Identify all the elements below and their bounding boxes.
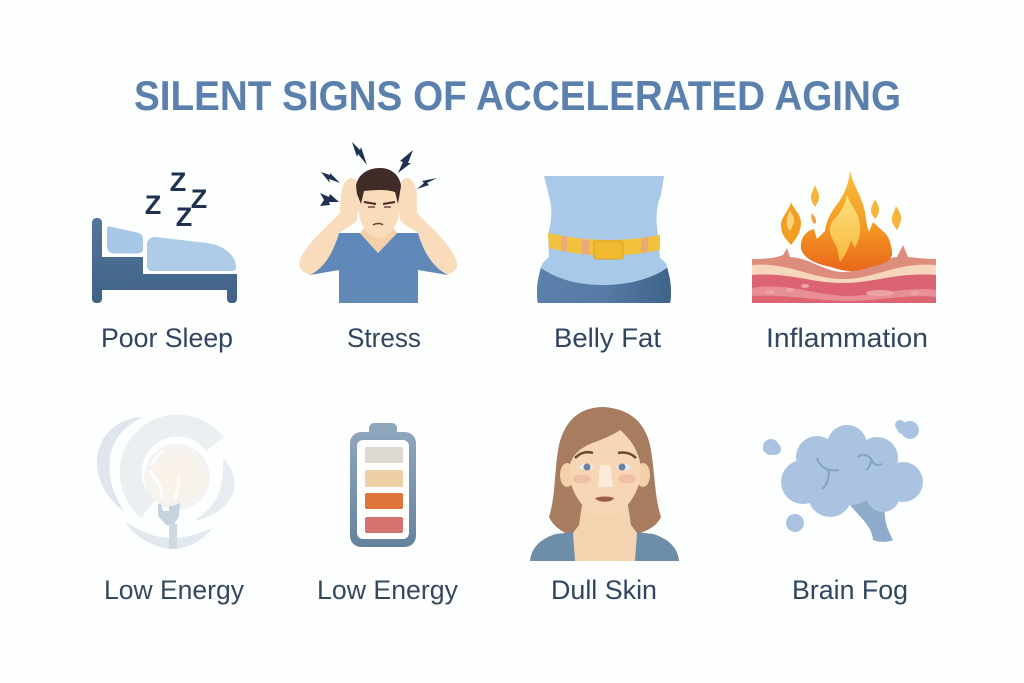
icon: sleep letters: Z	[170, 167, 186, 197]
label: Low Energy	[317, 575, 458, 605]
icon: woman with dull skin	[530, 407, 679, 561]
title: SILENT SIGNS OF ACCELERATED AGING	[134, 72, 901, 119]
icon: stress bolts	[320, 142, 437, 206]
icon: man holding head	[299, 168, 457, 303]
panel: belly fat	[537, 176, 671, 353]
panel: dull skin	[530, 407, 679, 605]
label: Poor Sleep	[101, 323, 233, 353]
icon: belly with tight belt	[537, 176, 671, 303]
icon: flame	[781, 170, 901, 271]
icon: foggy brain	[763, 420, 923, 542]
icon: sleep letters: Z	[145, 190, 161, 220]
icon: battery	[350, 423, 416, 547]
icon: sleep letters: Z	[176, 202, 192, 232]
label: Low Energy	[104, 575, 244, 605]
icon: skin layers	[752, 245, 936, 303]
panel: stress	[299, 142, 457, 353]
label: Brain Fog	[792, 575, 908, 605]
label: Belly Fat	[554, 323, 661, 353]
icon: sleep letters	[145, 167, 207, 232]
icon: bed	[92, 218, 237, 303]
icon: sleep letters: Z	[191, 184, 207, 214]
label: Dull Skin	[551, 575, 657, 605]
label: Inflammation	[766, 323, 928, 353]
panel: brain fog	[763, 420, 923, 605]
icon: fading light bulb	[97, 417, 235, 549]
panel: low energy bulb	[97, 417, 244, 605]
panel: inflammation	[752, 170, 936, 353]
label: Stress	[347, 323, 421, 353]
panel: low energy battery	[317, 423, 458, 605]
panel: poor sleep	[92, 167, 237, 353]
